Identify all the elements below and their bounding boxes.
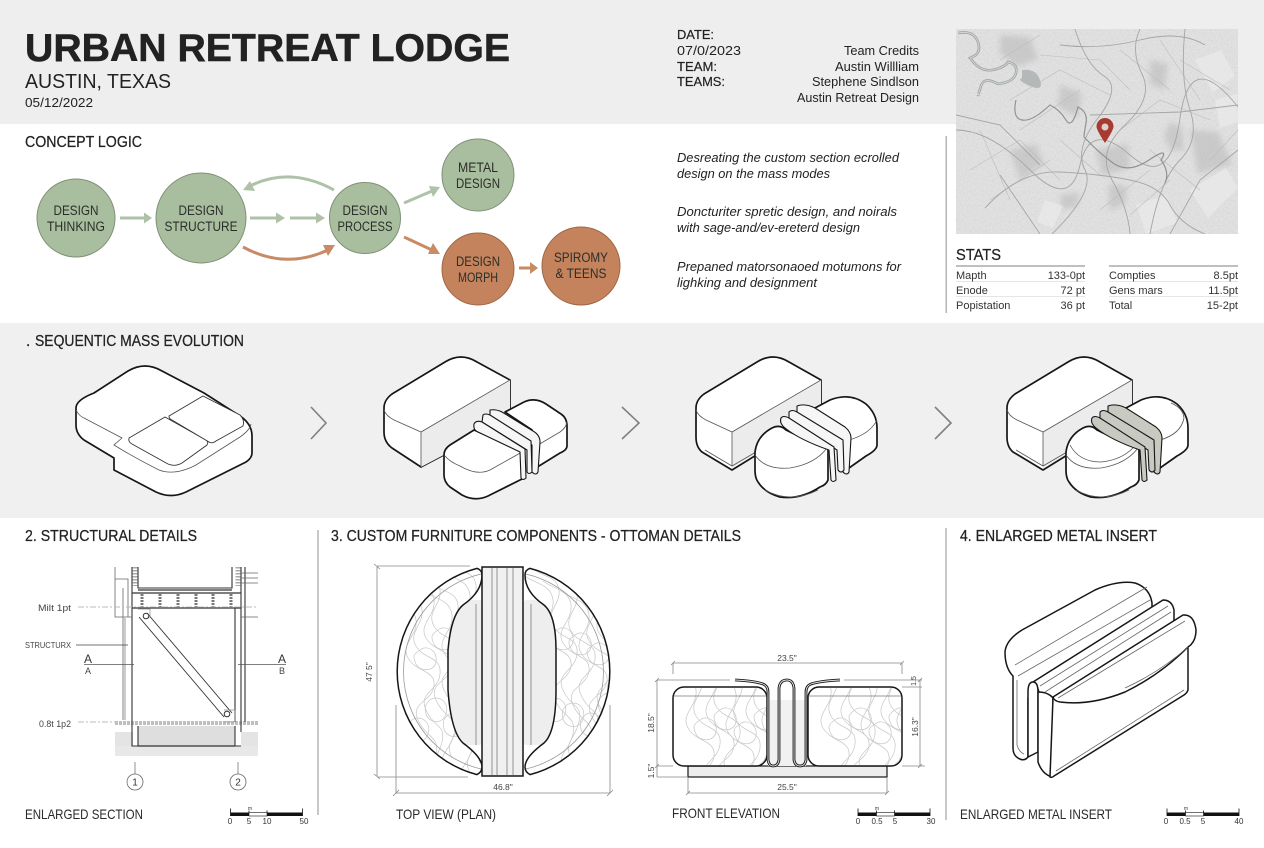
background: sequence band bbox=[0, 323, 1264, 518]
section mark A bbox=[84, 652, 134, 676]
dimension labels: 16.3" bbox=[910, 717, 920, 737]
info labels bbox=[677, 27, 741, 89]
node: metal design: METAL bbox=[458, 160, 498, 175]
scale bar: 0.5 bbox=[1179, 817, 1191, 826]
arrow: step 2 to 3 bbox=[622, 407, 639, 439]
dimension: plan width: 46.8" bbox=[493, 782, 513, 792]
label: structure leader: STRUCTURX bbox=[25, 640, 71, 650]
team credits: Team Credits bbox=[844, 43, 919, 58]
stats left column: Mapth bbox=[956, 270, 987, 282]
stats right column: 8.5pt bbox=[1214, 270, 1238, 282]
node: design morph bbox=[442, 233, 514, 305]
front elevation bbox=[648, 655, 936, 824]
scale bar: 0.5 bbox=[871, 817, 883, 826]
node: design structure: DESIGN bbox=[178, 203, 224, 218]
dimension labels: 25.5" bbox=[777, 782, 797, 792]
scale bar: 30 bbox=[927, 817, 936, 826]
note 1: design on the mass modes bbox=[677, 166, 830, 181]
node: design process bbox=[330, 182, 400, 254]
node: spiromy and teens bbox=[542, 227, 620, 305]
team credits bbox=[797, 43, 919, 105]
elevation: base bbox=[688, 766, 887, 777]
elevation: left cushion bbox=[672, 686, 767, 767]
node: design thinking: THINKING bbox=[47, 219, 105, 234]
plan: left wood half bbox=[396, 568, 482, 776]
map of Austin bbox=[956, 29, 1238, 234]
panel: furniture components bbox=[331, 528, 936, 848]
label: top level: Milt 1pt bbox=[38, 603, 71, 614]
dimension labels: 1.5" bbox=[646, 764, 656, 778]
heading: structural details: 2. STRUCTURAL DETAILS bbox=[25, 528, 197, 545]
node: spiromy and teens: SPIROMY bbox=[554, 250, 608, 265]
label: structure leader bbox=[25, 640, 128, 650]
panel: concept logic bbox=[25, 134, 620, 305]
section mark B bbox=[238, 652, 286, 676]
note 2: Doncturiter spretic design, and noirals bbox=[677, 204, 897, 219]
mass 1 bbox=[76, 366, 252, 496]
node: design morph: MORPH bbox=[458, 270, 498, 285]
stats left column bbox=[956, 270, 1085, 312]
node: design morph: DESIGN bbox=[456, 254, 500, 269]
mass 3 bbox=[696, 357, 877, 498]
note 1 bbox=[677, 150, 900, 181]
dividers: lower panels bbox=[318, 528, 946, 820]
plan: lens pads bbox=[448, 600, 556, 745]
light farm fields bbox=[1037, 50, 1238, 234]
section mark B: B bbox=[279, 666, 285, 676]
node: design structure bbox=[156, 173, 246, 263]
heading: sequential mass evolution: SEQUENTIC MASS EVOLUTION bbox=[35, 333, 244, 350]
grid bubble 1 bbox=[127, 762, 143, 790]
node: design thinking: DESIGN bbox=[54, 203, 98, 218]
stats left column: Popistation bbox=[956, 300, 1010, 312]
heading: concept logic: CONCEPT LOGIC bbox=[25, 134, 142, 151]
info labels: 07/0/2023 bbox=[677, 43, 741, 58]
team credits: Austin Retreat Design bbox=[797, 90, 919, 105]
scale bar: 40 bbox=[1235, 817, 1244, 826]
scale bar: 0 bbox=[856, 817, 861, 826]
map pin bbox=[1096, 118, 1114, 143]
info labels: TEAMS: bbox=[677, 74, 725, 89]
caption: top view: TOP VIEW (PLAN) bbox=[396, 806, 496, 822]
concept notes bbox=[677, 150, 902, 290]
node: metal design: DESIGN bbox=[456, 176, 500, 191]
mass 2 bbox=[384, 357, 567, 499]
info labels: DATE: bbox=[677, 27, 714, 42]
scale bar: 5 bbox=[1201, 817, 1206, 826]
foundation bbox=[115, 726, 258, 756]
team credits: Austin Willliam bbox=[835, 59, 919, 74]
stats heading: STATS bbox=[956, 247, 1001, 264]
metal fins bbox=[474, 410, 540, 480]
node: design structure: STRUCTURE bbox=[164, 219, 238, 234]
node: design process: PROCESS bbox=[338, 219, 392, 234]
dimension: plan height: 47 5" bbox=[364, 662, 374, 682]
scale bar: m bbox=[1184, 806, 1188, 812]
note 3: Prepaned matorsonaoed motumons for bbox=[677, 259, 902, 274]
dark vegetation patches bbox=[1000, 35, 1232, 211]
elevation: metal strip bbox=[735, 680, 840, 766]
stats table bbox=[956, 247, 1238, 312]
roads bbox=[956, 29, 1238, 234]
caption: front elevation: FRONT ELEVATION bbox=[672, 805, 780, 821]
scale bar: 10 bbox=[263, 817, 272, 826]
dimension labels: 18.5" bbox=[646, 713, 656, 733]
date: 05/12/2022 bbox=[25, 96, 93, 110]
plan: central metal band bbox=[476, 567, 531, 776]
scale bar bbox=[1164, 806, 1244, 826]
elevation: right cushion bbox=[807, 686, 903, 767]
info labels: TEAM: bbox=[677, 59, 717, 74]
scale bar bbox=[856, 806, 936, 826]
dimension labels: 23.5" bbox=[777, 653, 797, 663]
stats left column: Enode bbox=[956, 285, 988, 297]
scale bar: m bbox=[248, 806, 252, 812]
node: design process: DESIGN bbox=[342, 203, 388, 218]
title block bbox=[25, 27, 510, 110]
sage metal fins bbox=[1092, 405, 1162, 482]
grid bubble 1: 1 bbox=[132, 778, 138, 788]
background: header band bbox=[0, 0, 1264, 124]
stats right column bbox=[1109, 270, 1238, 312]
subtitle: AUSTIN, TEXAS bbox=[25, 70, 171, 93]
stats right column: 11.5pt bbox=[1208, 285, 1238, 297]
lake bbox=[1020, 70, 1041, 88]
section mark A: A bbox=[84, 652, 92, 666]
stats right column: Gens mars bbox=[1109, 285, 1163, 297]
grid bubble 2 bbox=[230, 762, 246, 790]
plan: dimensions bbox=[374, 564, 613, 796]
note 2: with sage-and/ev-ereterd design bbox=[677, 220, 860, 235]
project info bbox=[677, 27, 919, 105]
scale bar: 0 bbox=[228, 817, 233, 826]
heading: sequential mass evolution: . bbox=[26, 333, 30, 350]
minor streets bbox=[970, 35, 1238, 215]
caption: metal insert: ENLARGED METAL INSERT bbox=[960, 806, 1112, 822]
node: metal design bbox=[442, 139, 514, 211]
stats left column: 36 pt bbox=[1061, 300, 1085, 312]
stats right column: 15-2pt bbox=[1207, 300, 1238, 312]
grid bubble 2: 2 bbox=[235, 778, 241, 788]
elevation: dimensions bbox=[655, 661, 925, 795]
back leaf bbox=[1005, 582, 1152, 760]
node: design thinking bbox=[37, 179, 115, 257]
metal fins bbox=[780, 405, 851, 482]
scale bar: 5 bbox=[893, 817, 898, 826]
section mark B: A bbox=[278, 652, 286, 666]
mass 4 bbox=[1007, 357, 1188, 498]
panel: structural details bbox=[25, 528, 309, 826]
section drawing bbox=[78, 567, 258, 756]
panel: enlarged metal insert bbox=[960, 528, 1244, 826]
plan: right wood half bbox=[524, 568, 611, 776]
node: spiromy and teens: & TEENS bbox=[556, 266, 606, 281]
scale bar bbox=[228, 806, 309, 826]
insert drawing bbox=[1005, 582, 1196, 777]
label: base level: 0.8t 1p2 bbox=[39, 719, 71, 730]
note 3: lighking and designment bbox=[677, 275, 818, 290]
caption: enlarged section: ENLARGED SECTION bbox=[25, 806, 143, 822]
arrow: step 3 to 4 bbox=[935, 407, 951, 439]
scale bar: 0 bbox=[1164, 817, 1169, 826]
scale bar: 5 bbox=[247, 817, 252, 826]
scale bar: 50 bbox=[300, 817, 309, 826]
dimension labels: 1.5 bbox=[911, 676, 918, 686]
river bbox=[958, 32, 1167, 183]
note 3 bbox=[677, 259, 902, 290]
heading: furniture: 3. CUSTOM FURNITURE COMPONENTS - OTTOMAN DETAILS bbox=[331, 528, 741, 545]
arrows: terracotta flow bbox=[243, 237, 538, 274]
vertical divider: concept/stats bbox=[946, 136, 947, 313]
stats right column: Compties bbox=[1109, 270, 1156, 282]
dimension labels bbox=[646, 653, 920, 792]
note 1: Desreating the custom section ecrolled bbox=[677, 150, 900, 165]
arrows: sage flow bbox=[120, 177, 440, 224]
stats right column: Total bbox=[1109, 300, 1132, 312]
plan view bbox=[364, 564, 634, 822]
team credits: Stephene Sindlson bbox=[812, 74, 919, 89]
heading: metal insert: 4. ENLARGED METAL INSERT bbox=[960, 528, 1157, 545]
scale bar: m bbox=[875, 806, 879, 812]
stats left column: 72 pt bbox=[1061, 285, 1085, 297]
stats left column: 133-0pt bbox=[1048, 270, 1085, 282]
front panel bbox=[1038, 692, 1053, 777]
arrow: step 1 to 2 bbox=[311, 407, 326, 439]
middle fold bbox=[1033, 600, 1174, 698]
note 2 bbox=[677, 204, 897, 235]
section mark A: A bbox=[85, 666, 91, 676]
title: URBAN RETREAT LODGE bbox=[25, 27, 510, 70]
